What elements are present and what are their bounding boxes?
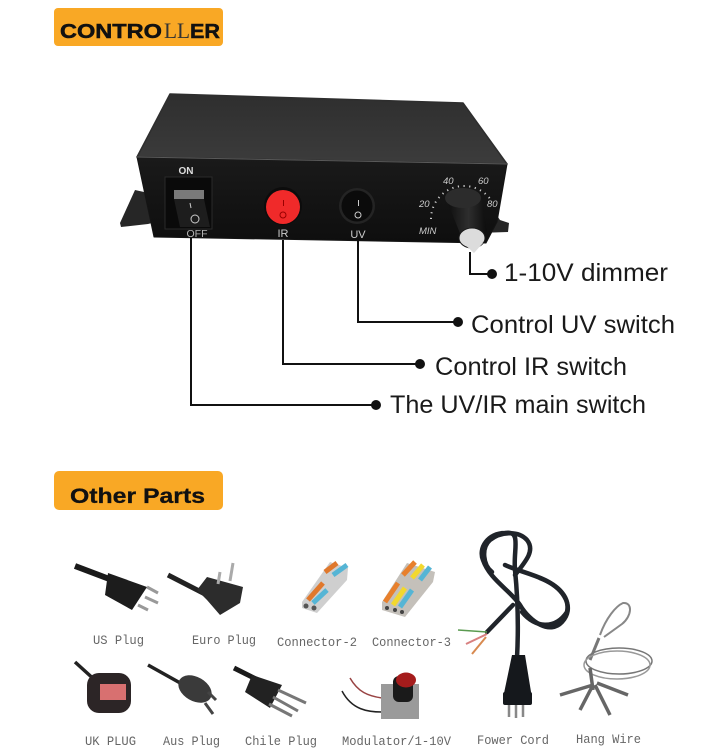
callout: main switch xyxy=(191,238,646,419)
heading: controller xyxy=(54,8,223,46)
IR switch xyxy=(264,187,302,240)
caption row 1: US Plug xyxy=(93,633,144,648)
IR switch: IR xyxy=(278,228,289,240)
callout: control IR switch: Control IR switch xyxy=(435,353,627,381)
heading: controller: CONTRO xyxy=(60,21,162,43)
icon: euro plug xyxy=(168,563,243,615)
icon: UK plug xyxy=(75,662,131,713)
UV switch: UV xyxy=(350,229,366,241)
caption row 1: Euro Plug xyxy=(192,633,256,648)
dimmer knob: 20 xyxy=(418,199,430,210)
dimmer knob: 80 xyxy=(487,199,498,210)
callout: control UV switch xyxy=(358,240,675,339)
icon: connector-2 xyxy=(302,562,348,613)
callout: control IR switch xyxy=(283,240,627,381)
box front xyxy=(137,157,507,243)
mounting brackets xyxy=(120,190,509,233)
callout: 1-10V dimmer: 1-10V dimmer xyxy=(504,259,668,287)
controller device xyxy=(120,94,509,253)
box top xyxy=(137,94,507,164)
caption row 2: Chile Plug xyxy=(245,734,317,749)
caption row 2: Modulator/1-10V xyxy=(342,734,451,749)
icon: US plug xyxy=(75,566,158,610)
callout: main switch: The UV/IR main switch xyxy=(390,391,646,419)
UV switch xyxy=(339,188,375,241)
icon: power cord xyxy=(458,533,568,718)
caption row 2: UK PLUG xyxy=(85,734,136,749)
main rocker switch: OFF xyxy=(186,228,208,240)
dimmer knob: MIN xyxy=(419,226,437,237)
icon: aus plug xyxy=(148,665,217,714)
caption row 1: Connector-3 xyxy=(372,635,451,650)
heading: controller: ER xyxy=(190,21,221,43)
dimmer knob: 60 xyxy=(478,176,489,187)
main rocker switch: ON xyxy=(178,166,194,177)
main rocker switch xyxy=(165,166,212,240)
heading: other parts: Other Parts xyxy=(70,485,205,508)
dimmer knob xyxy=(418,176,498,253)
callout: 1-10V dimmer xyxy=(470,252,668,287)
caption row 2: Fower Cord xyxy=(477,733,549,748)
icon: chile plug xyxy=(234,668,306,716)
caption row 1 xyxy=(93,633,451,650)
caption row 1: Connector-2 xyxy=(277,635,357,650)
caption row 2: Hang Wire xyxy=(576,732,641,747)
icon: connector-3 xyxy=(382,562,435,617)
heading: controller: LL xyxy=(164,18,190,43)
caption row 2 xyxy=(85,732,641,749)
callout: control UV switch: Control UV switch xyxy=(471,311,675,339)
icon: modulator xyxy=(342,672,419,719)
heading: other parts xyxy=(54,471,223,510)
caption row 2: Aus Plug xyxy=(163,734,220,749)
dimmer knob: 40 xyxy=(443,176,454,187)
icon: hang wire xyxy=(560,603,652,715)
